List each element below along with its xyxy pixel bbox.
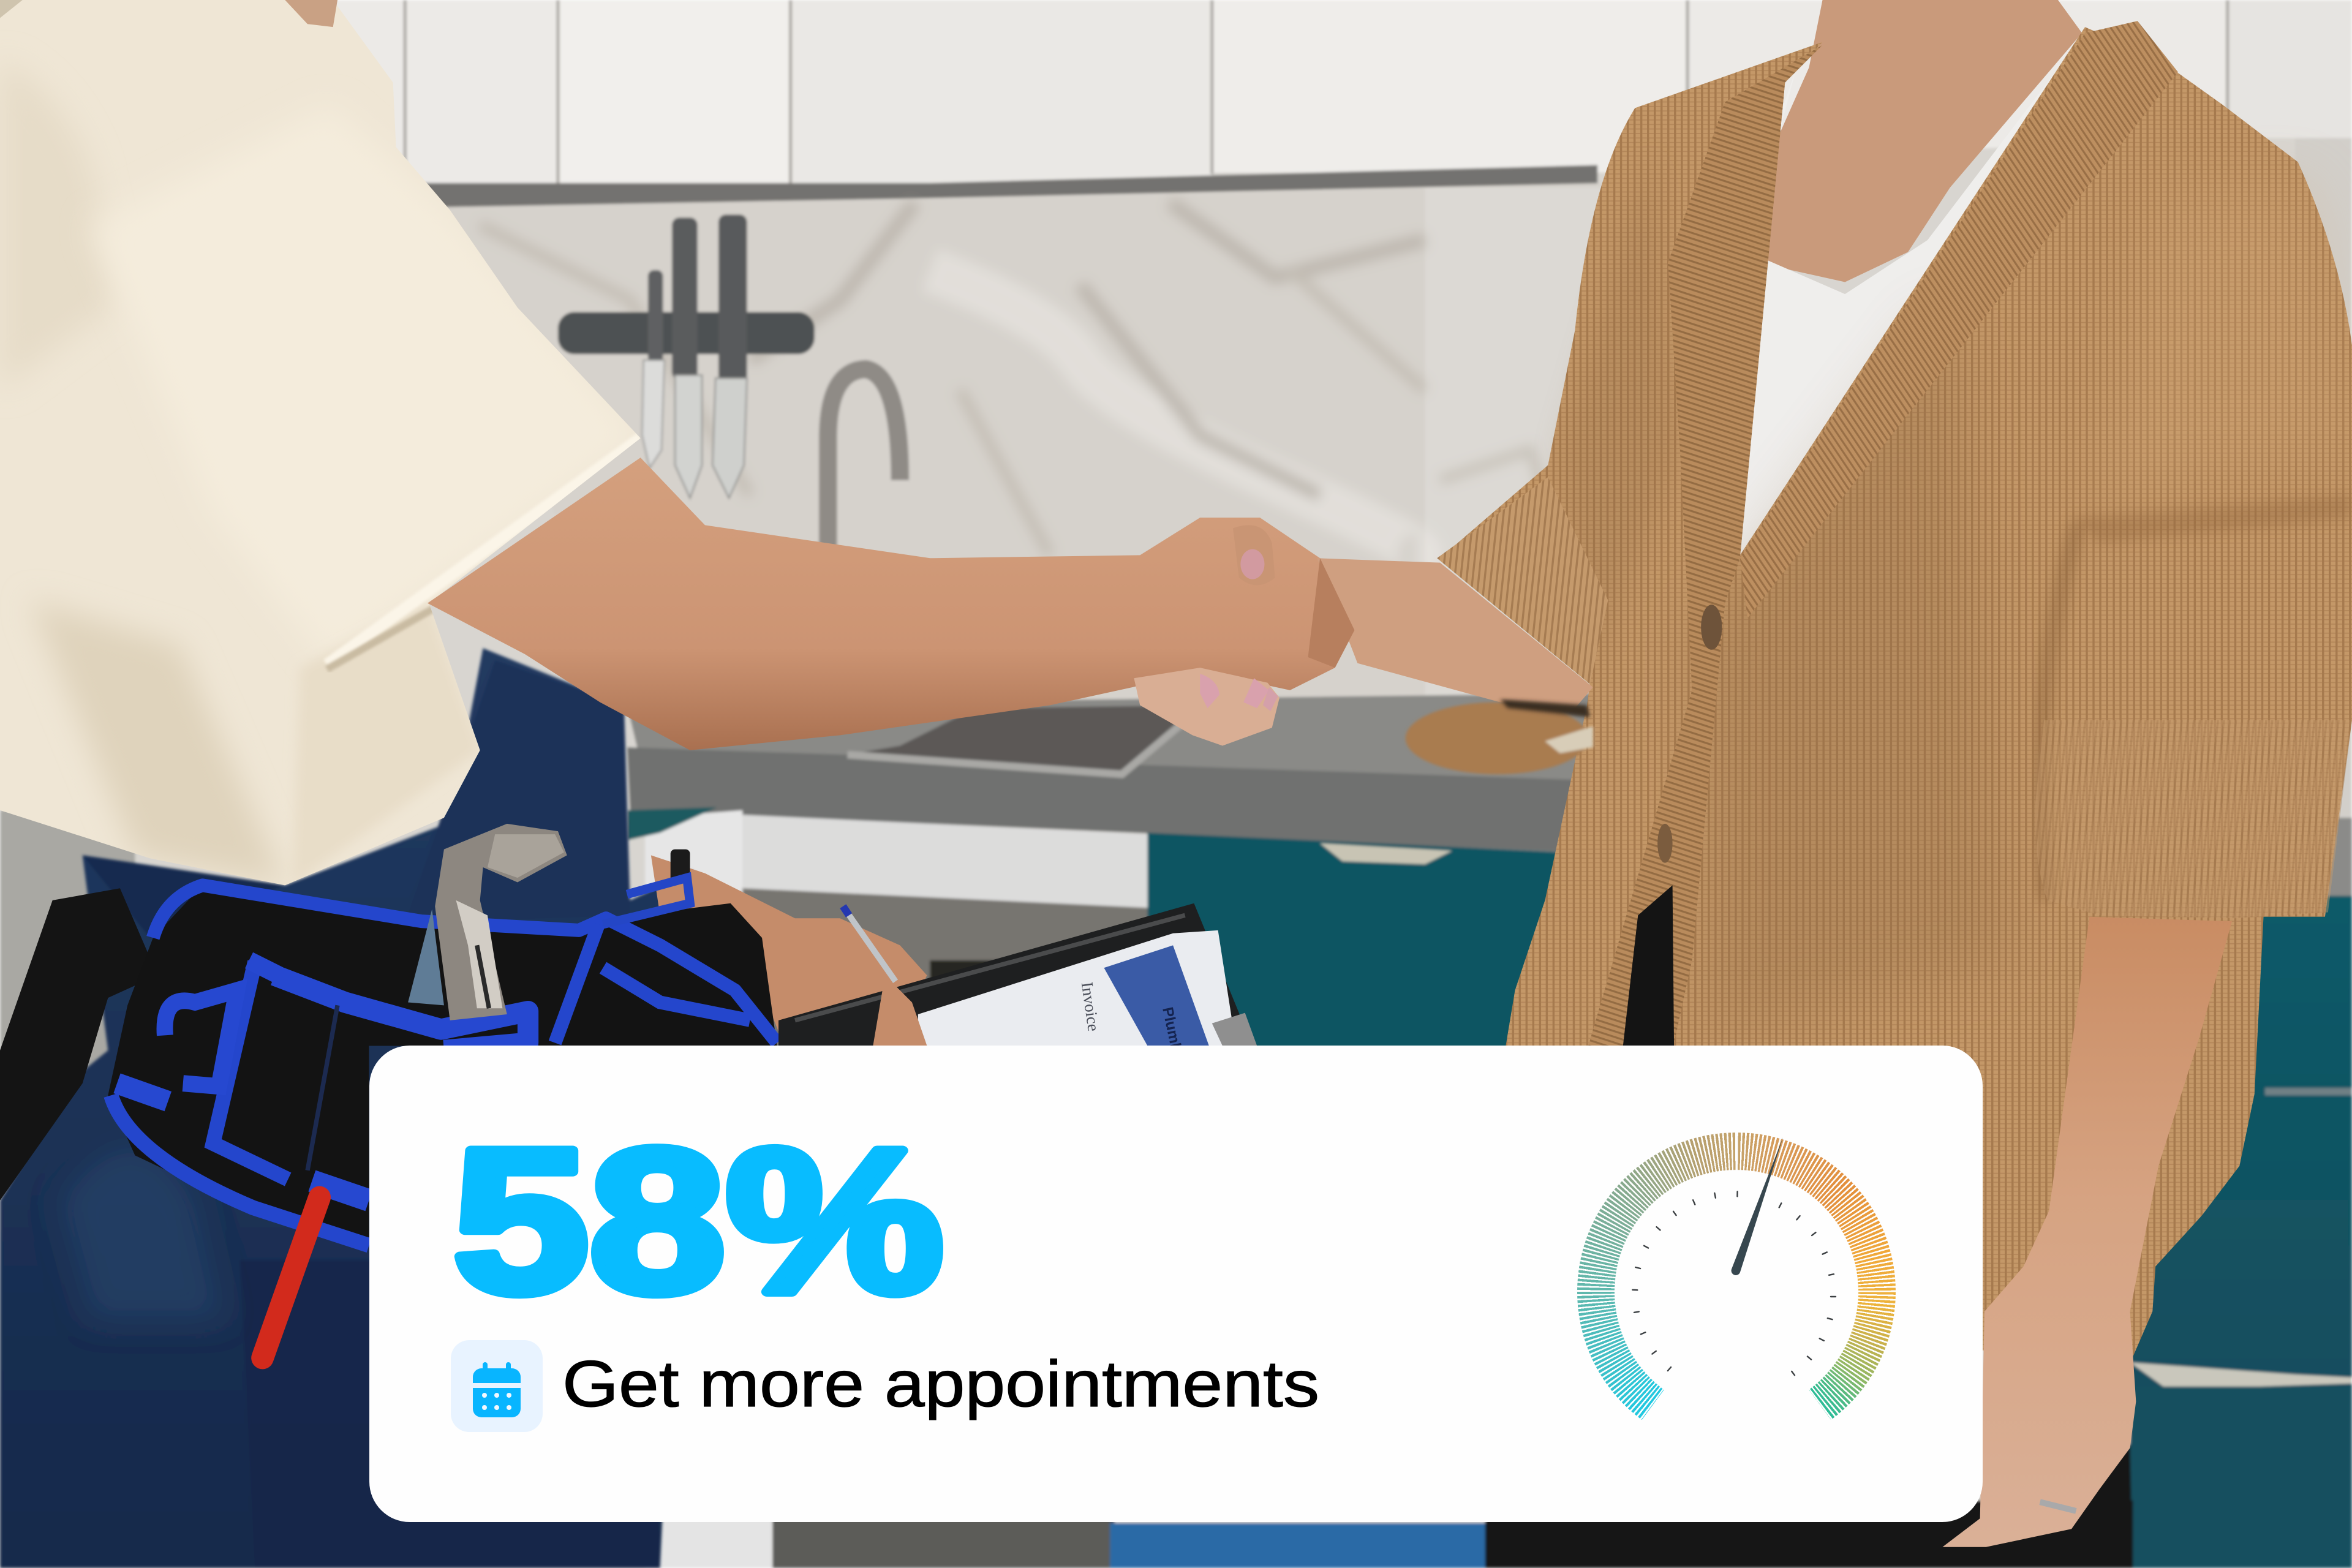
black pen clip (671, 850, 690, 882)
gauge coloured radial arc (1577, 1133, 1896, 1451)
right wall (2295, 138, 2352, 888)
tool belt (108, 878, 777, 1245)
caption: Get more appointments (562, 1347, 1319, 1420)
clipboard with invoice (778, 903, 1257, 1054)
under cabinet shadow strip (405, 165, 1597, 210)
upper cabinets (0, 0, 2352, 190)
gauge needle (1732, 1137, 1783, 1275)
woman arm (1317, 558, 1593, 708)
right collar band (1740, 21, 2178, 618)
sleeve cuff (2035, 720, 2352, 918)
black trousers (1623, 885, 1674, 1046)
hand holding clipboard, behind belt (651, 855, 927, 1035)
teal cabinet (1147, 833, 1567, 1050)
invoice label: Invoice (1078, 981, 1103, 1032)
under-counter units (627, 807, 1147, 1050)
white stat card (369, 1046, 1983, 1522)
cardigan body (1440, 27, 2352, 1357)
gauge ticks (1632, 1191, 1836, 1375)
knives (642, 214, 747, 498)
arm (428, 458, 1354, 750)
neck and chest (1764, 0, 2082, 282)
left background behind apron (0, 810, 135, 1080)
woman: customer (1317, 0, 2352, 1547)
red screwdriver (263, 1197, 320, 1358)
ring (2040, 1502, 2076, 1511)
left placket (1587, 45, 1823, 1050)
big stat 58%: 58% (453, 1106, 944, 1335)
marble backsplash (442, 183, 1605, 720)
cardigan shading (1560, 150, 2352, 1035)
white tank top (1737, 33, 2085, 563)
handshake (1134, 525, 1354, 746)
man: plumber (0, 0, 1354, 1568)
plumbing service label: Plumb (1159, 1006, 1185, 1054)
pliers (408, 824, 567, 1020)
woman forearm and hand (1942, 917, 2232, 1547)
left sleeve cuff (1437, 477, 1608, 684)
icon: calendar (451, 1340, 543, 1432)
black strap (0, 888, 157, 1200)
magnetic knife rail (558, 312, 815, 354)
woven coaster (1406, 699, 1593, 774)
bottom strip below card (645, 1444, 2133, 1568)
countertop (627, 693, 1605, 852)
right lower cabinets (2130, 818, 2352, 1568)
buttons (1657, 605, 1722, 863)
shirt (0, 0, 641, 885)
faucet (828, 369, 900, 548)
apron (0, 648, 693, 1568)
